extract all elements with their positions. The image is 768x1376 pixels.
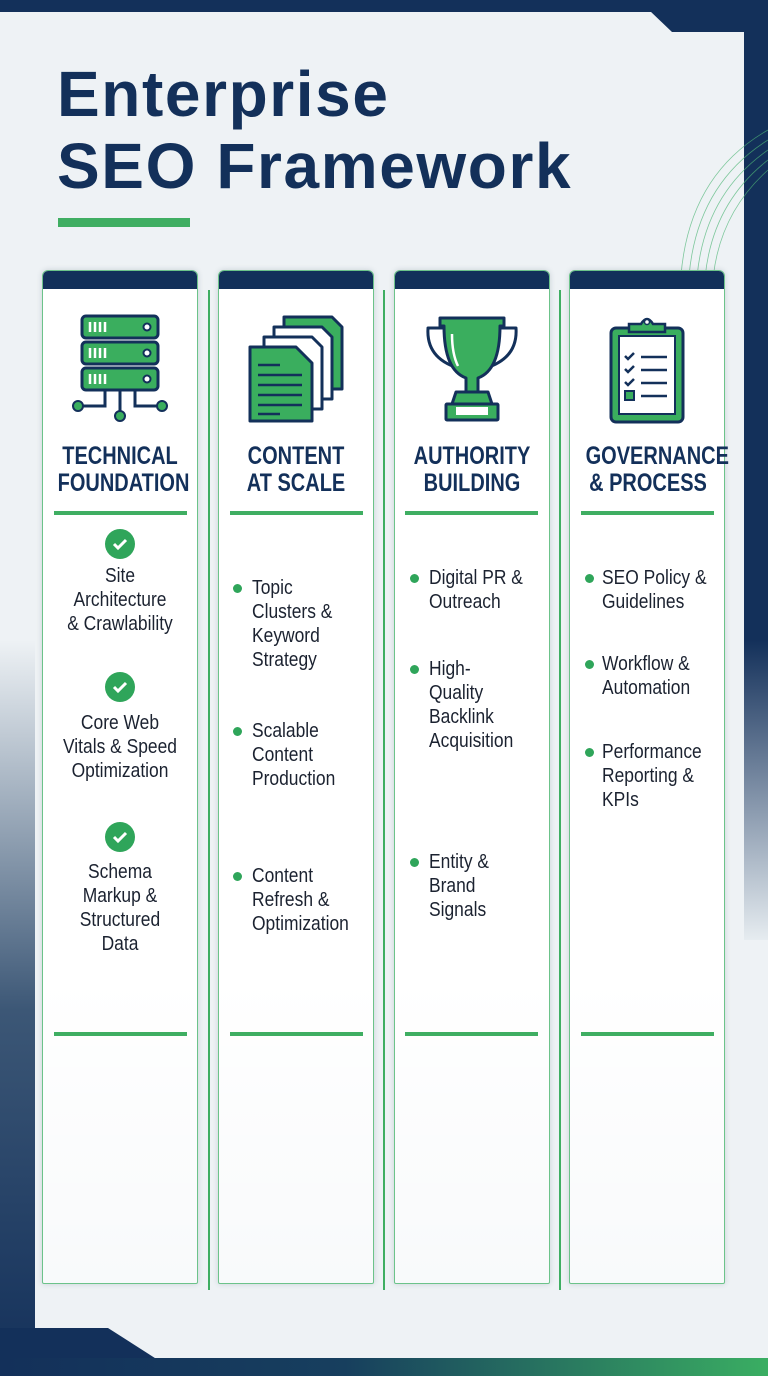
panel: content at scale [218,270,374,1284]
text: schema markup: Structured [80,908,160,931]
text: schema markup [80,860,160,955]
icon: check 1 [105,529,135,559]
heading: authority building [414,442,530,497]
bullet list: content [233,576,349,935]
heading: content at scale [247,442,345,497]
text: site architecture: Architecture [74,588,166,611]
bullet list: governance: KPIs [602,788,639,811]
bullet list: governance: Reporting & [602,764,694,787]
panel: governance [569,270,725,1284]
heading: governance & process: GOVERNANCE [586,442,729,470]
bullet list: authority: Quality [429,681,483,704]
bullet list: governance: Performance [602,740,702,763]
bullet list: authority: Brand [429,874,476,897]
panel: technical foundation [42,270,198,1284]
bullet list: content: Content [252,743,313,766]
bullet list: governance: Automation [602,676,690,699]
heading: content at scale: AT SCALE [247,469,345,497]
text: site architecture: & Crawlability [67,612,173,635]
bullet list: content: Refresh & [252,888,329,911]
separators [208,290,210,1290]
bullet list: authority: Outreach [429,590,501,613]
text: schema markup: Schema [88,860,152,883]
heading: technical foundation: FOUNDATION [58,469,189,497]
bullet list: content: Keyword [252,624,320,647]
text: core web vitals: Core Web [81,711,159,734]
title underline [58,218,190,227]
bullet list: governance [585,566,707,811]
panel: authority building [394,270,550,1284]
title: SEO Framework [57,130,572,202]
bullet list: authority: High- [429,657,471,680]
bullet list: content: Clusters & [252,600,332,623]
text: core web vitals [63,711,177,782]
bullet list: authority: Signals [429,898,486,921]
bullet list: governance: Workflow & [602,652,690,675]
icon: server [72,314,168,422]
heading: content at scale: CONTENT [248,442,344,470]
bullet list: governance: SEO Policy & [602,566,707,589]
bullet list: content: Scalable [252,719,319,742]
heading: authority building: AUTHORITY [414,442,530,470]
bullet list: content: Strategy [252,648,317,671]
icon: check 3 [105,822,135,852]
heading: authority building: BUILDING [424,469,520,497]
heading: technical foundation [58,442,189,497]
bullet list: authority: Digital PR & [429,566,523,589]
bullet list: authority: Entity & [429,850,489,873]
text: core web vitals: Vitals & Speed [63,735,177,758]
title: Enterprise [57,58,390,130]
heading: technical foundation: TECHNICAL [62,442,178,470]
text: site architecture [67,564,173,635]
heading: governance & process: & PROCESS [589,469,707,497]
icon: documents [248,316,344,422]
heading: governance & process [586,442,729,497]
text: schema markup: Data [102,932,138,955]
text: schema markup: Markup & [83,884,157,907]
bullet list: content: Production [252,767,335,790]
icon: check 2 [105,672,135,702]
bullet list: authority: Acquisition [429,729,513,752]
bullet list: authority [410,566,523,921]
text: core web vitals: Optimization [72,759,168,782]
title [57,58,572,202]
icon: clipboard [610,318,684,424]
bullet list: content: Topic [252,576,293,599]
icon: trophy [426,316,518,422]
bullet list: authority: Backlink [429,705,494,728]
bullet list: content: Optimization [252,912,349,935]
text: site architecture: Site [105,564,135,587]
bullet list: governance: Guidelines [602,590,684,613]
bullet list: content: Content [252,864,313,887]
